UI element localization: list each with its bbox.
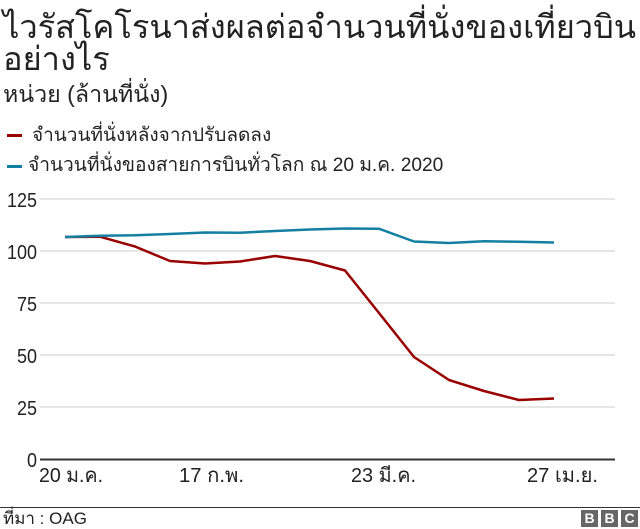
footer rule: [0, 507, 640, 508]
BBC logo: B: [584, 510, 595, 526]
y axis labels: 125: [7, 190, 37, 212]
y axis labels: 100: [7, 242, 37, 264]
title: ไวรัสโคโรนาส่งผลต่อจำนวนที่นั่งของเที่ยวบิน: [3, 8, 636, 45]
y axis gridlines: [40, 199, 615, 407]
x axis labels: 17 ก.พ.: [179, 465, 244, 487]
legend item: reduced seats: จำนวนที่นั่งหลังจากปรับลดลง: [32, 125, 271, 146]
BBC logo: [581, 510, 638, 527]
y axis labels: 75: [17, 294, 37, 316]
legend: [7, 122, 443, 176]
BBC logo: C: [624, 510, 635, 526]
y axis labels: 0: [27, 450, 37, 472]
title: [0, 4, 636, 77]
x axis baseline: [40, 458, 615, 460]
subtitle: unit: หน่วย (ล้านที่นั่ง): [3, 81, 168, 107]
legend item: global seats: จำนวนที่นั่งของสายการบินทั่วโลก ณ 20 ม.ค. 2020: [28, 155, 443, 176]
x axis labels: 23 มี.ค.: [351, 465, 416, 487]
title: อย่างไร: [3, 40, 110, 77]
y axis labels: [7, 190, 37, 472]
source: ที่มา : OAG: [3, 509, 87, 528]
series: reduced seats line: [65, 237, 554, 400]
x axis labels: [39, 465, 598, 487]
series: global seats line: [65, 228, 554, 243]
y axis labels: 25: [17, 398, 37, 420]
BBC logo: B: [604, 510, 615, 526]
y axis labels: 50: [17, 346, 37, 368]
x axis labels: 27 เม.ย.: [527, 465, 598, 487]
x axis labels: 20 ม.ค.: [39, 465, 103, 487]
